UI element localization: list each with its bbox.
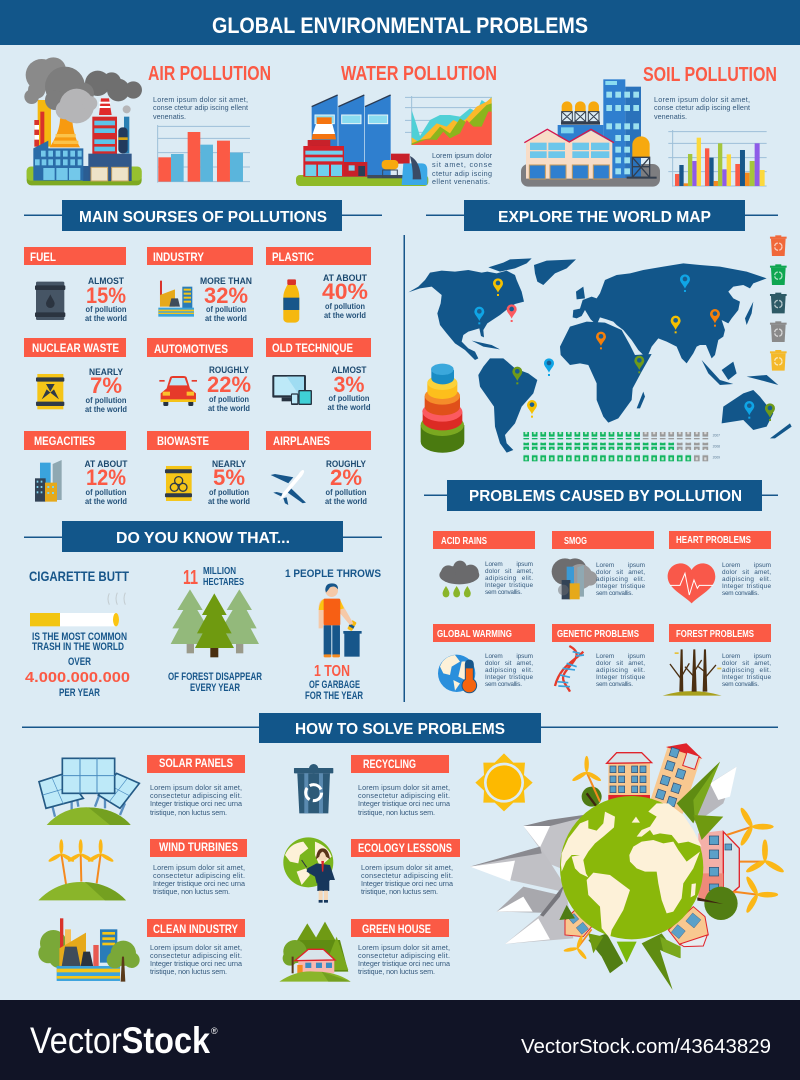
card: clean industry: CLEAN INDUSTRY bbox=[153, 922, 238, 936]
card: plastic: PLASTIC bbox=[272, 250, 314, 264]
card: megacities: 12% bbox=[86, 465, 126, 490]
card: heart problems: Integer tristique bbox=[722, 583, 771, 590]
card: recycling: consectetur adipiscing elit. bbox=[358, 791, 450, 800]
card: industry: 32% bbox=[204, 283, 248, 308]
card: solar panels: SOLAR PANELS bbox=[159, 756, 233, 770]
card: industry bbox=[147, 247, 253, 323]
fact: forest loss: HECTARES bbox=[203, 577, 244, 588]
icons: coloured recycling bins legend bbox=[770, 235, 787, 371]
fact: garbage per person: FOR THE YEAR bbox=[305, 690, 363, 702]
card: airplanes: of pollution bbox=[326, 487, 366, 497]
card: genetic problems: dolor sit amet, bbox=[596, 660, 645, 667]
card: genetic problems bbox=[552, 624, 654, 692]
card: automotives: AUTOMOTIVES bbox=[154, 342, 228, 356]
card: acid rains: ACID RAINS bbox=[441, 536, 487, 547]
card: wind turbines bbox=[38, 839, 247, 900]
card: smog: dolor sit amet, bbox=[596, 569, 645, 576]
card: clean industry: Integer tristique orci nec urna bbox=[150, 959, 242, 968]
illustration: sun and green planet bbox=[470, 738, 785, 990]
fact: cigarette butt: 4.000.000.000 bbox=[25, 669, 130, 686]
card: wind turbines: Lorem ipsum dolor sit amet, bbox=[153, 863, 245, 872]
icon: trees bbox=[171, 589, 259, 657]
text: water description: sit amet, conse bbox=[432, 160, 492, 169]
card: old technique: OLD TECHNIQUE bbox=[272, 341, 353, 355]
card: solar panels: Integer tristique orci nec urna bbox=[150, 799, 242, 808]
card: smog bbox=[552, 531, 654, 599]
card: acid rains bbox=[433, 531, 535, 597]
card: genetic problems: sem convallis. bbox=[596, 681, 633, 688]
card: global warming: GLOBAL WARMING bbox=[437, 629, 512, 640]
card: wind turbines: Integer tristique orci nec urna bbox=[153, 879, 245, 888]
card: plastic: 40% bbox=[322, 279, 368, 304]
card: global warming: Lorem ipsum bbox=[485, 653, 533, 660]
fact: cigarette butt bbox=[25, 568, 130, 699]
card: biowaste: at the world bbox=[208, 496, 250, 506]
icon: cigarette bbox=[30, 593, 125, 626]
fact: cigarette butt: TRASH IN THE WORLD bbox=[32, 641, 124, 653]
text: soil description: Lorem ipsum dolor sit amet, bbox=[654, 95, 750, 104]
trees on planet bbox=[559, 762, 738, 990]
card: smog: Integer tristique bbox=[596, 583, 645, 590]
card: megacities: of pollution bbox=[86, 487, 126, 497]
fact: garbage per person: 1 TON bbox=[314, 663, 350, 680]
card: green house: GREEN HOUSE bbox=[362, 922, 431, 936]
card: airplanes: 2% bbox=[330, 465, 362, 490]
map: continents bbox=[408, 258, 792, 453]
pictogram: recycling bin rows bbox=[523, 432, 720, 461]
mountains bbox=[470, 767, 737, 944]
title banner: GLOBAL ENVIRONMENTAL PROBLEMS bbox=[212, 13, 588, 38]
panel: problems grid bbox=[433, 531, 771, 696]
fact: forest loss: EVERY YEAR bbox=[190, 682, 240, 694]
text: soil description: conse ctetur adip iscing ellent bbox=[654, 103, 750, 112]
heading: main sources of pollutions bbox=[24, 200, 382, 231]
footer watermark bar: VectorStock bbox=[30, 1020, 210, 1061]
card: automotives: ROUGHLY bbox=[209, 365, 250, 376]
card: smog: sem convallis. bbox=[596, 590, 633, 597]
card: recycling: Lorem ipsum dolor sit amet, bbox=[358, 783, 450, 792]
heading: main sources of pollutions: MAIN SOURSES OF POLLUTIONS bbox=[79, 209, 327, 226]
footer watermark bar bbox=[0, 1000, 800, 1080]
heading: problems caused by pollution bbox=[424, 480, 778, 511]
card: solar panels: Lorem ipsum dolor sit amet, bbox=[150, 783, 242, 792]
card: green house: Lorem ipsum dolor sit amet, bbox=[358, 943, 450, 952]
card: acid rains: Integer tristique bbox=[485, 582, 533, 589]
heading: problems caused by pollution: PROBLEMS CAUSED BY POLLUTION bbox=[469, 488, 742, 505]
card: genetic problems: Lorem ipsum bbox=[596, 653, 645, 660]
fact: cigarette butt: PER YEAR bbox=[59, 687, 100, 699]
card: nuclear waste: of pollution bbox=[86, 395, 126, 405]
card: forest problems: adipiscing elit. bbox=[722, 667, 771, 674]
bar chart: soil bbox=[668, 130, 767, 187]
card: megacities: MEGACITIES bbox=[34, 434, 95, 448]
pictogram: recycling bin rows: 2009 bbox=[713, 456, 720, 460]
globe bbox=[560, 796, 703, 939]
fact: garbage per person bbox=[285, 568, 381, 702]
card: old technique: at the world bbox=[328, 402, 370, 412]
card: industry: of pollution bbox=[206, 304, 246, 314]
card: nuclear waste bbox=[24, 338, 127, 414]
card: forest problems bbox=[663, 624, 771, 696]
card: old technique: ALMOST bbox=[332, 365, 367, 376]
footer watermark bar: ® bbox=[211, 1026, 218, 1036]
card: nuclear waste: 7% bbox=[90, 373, 122, 398]
icon: air pollution factory bbox=[24, 57, 142, 185]
card: genetic problems: Integer tristique bbox=[596, 674, 645, 681]
heading: water pollution: WATER POLLUTION bbox=[341, 63, 497, 85]
card: solar panels: tristique, non luctus sem. bbox=[150, 808, 227, 817]
card: airplanes: AIRPLANES bbox=[273, 434, 330, 448]
icon: sun bbox=[475, 753, 533, 811]
card: acid rains: sem convallis. bbox=[485, 589, 522, 596]
card: fuel: of pollution bbox=[86, 304, 126, 314]
pictogram: recycling bin rows: 2008 bbox=[713, 444, 720, 448]
card: global warming: sem convallis. bbox=[485, 681, 522, 688]
card: megacities bbox=[24, 431, 128, 506]
card: acid rains: adipiscing elit. bbox=[485, 575, 533, 582]
heading: air pollution: AIR POLLUTION bbox=[148, 63, 271, 85]
card: clean industry: tristique, non luctus sem. bbox=[150, 967, 227, 976]
wind turbines on planet bbox=[562, 756, 785, 961]
card: fuel: ALMOST bbox=[88, 276, 124, 287]
text: water description: Lorem ipsum dolor bbox=[432, 151, 493, 160]
heading: do you know that: DO YOU KNOW THAT... bbox=[116, 530, 290, 547]
card: nuclear waste: NEARLY bbox=[89, 367, 124, 378]
card: forest problems: Lorem ipsum bbox=[722, 653, 771, 660]
card: biowaste: BIOWASTE bbox=[157, 434, 209, 448]
panel: main sources grid bbox=[24, 247, 371, 506]
card: clean industry bbox=[38, 918, 245, 982]
card: old technique bbox=[266, 338, 371, 412]
card: wind turbines: consectetur adipiscing elit. bbox=[153, 871, 245, 880]
card: global warming: adipiscing elit. bbox=[485, 667, 533, 674]
card: plastic: at the world bbox=[324, 310, 366, 320]
card: smog: SMOG bbox=[564, 536, 587, 547]
text: water description: ctetur adip iscing bbox=[432, 169, 492, 178]
fact: cigarette butt: CIGARETTE BUTT bbox=[29, 568, 129, 584]
card: old technique: 3% bbox=[334, 372, 364, 397]
card: fuel bbox=[24, 247, 127, 323]
card: nuclear waste: at the world bbox=[85, 404, 127, 414]
card: automotives: at the world bbox=[208, 403, 250, 413]
panel: air pollution bbox=[24, 57, 271, 185]
card: forest problems: Integer tristique bbox=[722, 674, 771, 681]
fact: forest loss bbox=[168, 566, 262, 694]
card: nuclear waste: NUCLEAR WASTE bbox=[32, 341, 119, 355]
text: soil description bbox=[654, 95, 750, 121]
card: smog: Lorem ipsum bbox=[596, 562, 645, 569]
panel: world map bbox=[408, 235, 792, 461]
card: recycling bbox=[294, 755, 450, 817]
card: airplanes bbox=[266, 431, 371, 506]
card: ecology lessons: ECOLOGY LESSONS bbox=[358, 841, 452, 855]
card: ecology lessons: Integer tristique orci nec urna bbox=[361, 879, 453, 888]
area chart: water bbox=[405, 96, 492, 145]
card: ecology lessons: Lorem ipsum dolor sit amet, bbox=[361, 863, 453, 872]
card: forest problems: sem convallis. bbox=[722, 681, 759, 688]
buildings on planet bbox=[565, 738, 739, 947]
card: airplanes: ROUGHLY bbox=[326, 459, 367, 470]
icon: soil pollution factory bbox=[521, 79, 660, 187]
card: ecology lessons: tristique, non luctus sem. bbox=[361, 887, 438, 896]
card: solar panels bbox=[39, 755, 245, 825]
card: clean industry: consectetur adipiscing elit. bbox=[150, 951, 242, 960]
panel: water pollution bbox=[296, 63, 497, 186]
heading: explore the world map: EXPLORE THE WORLD MAP bbox=[498, 209, 711, 226]
icon: person and bin bbox=[319, 583, 362, 657]
card: recycling: Integer tristique orci nec urna bbox=[358, 799, 450, 808]
card: biowaste: NEARLY bbox=[212, 459, 247, 470]
map pins bbox=[474, 274, 775, 421]
card: fuel: at the world bbox=[85, 313, 127, 323]
card: fuel: 15% bbox=[86, 283, 126, 308]
card: ecology lessons: consectetur adipiscing elit. bbox=[361, 871, 453, 880]
card: heart problems: dolor sit amet, bbox=[722, 569, 771, 576]
card: megacities: AT ABOUT bbox=[84, 459, 128, 470]
card: fuel: FUEL bbox=[30, 250, 56, 264]
card: automotives: 22% bbox=[207, 372, 251, 397]
card: airplanes: at the world bbox=[325, 496, 367, 506]
text: air description bbox=[153, 95, 248, 121]
card: recycling: tristique, non luctus sem. bbox=[358, 808, 435, 817]
title banner bbox=[0, 0, 800, 45]
panel: do you know facts bbox=[25, 566, 381, 702]
card: biowaste: 5% bbox=[213, 465, 245, 490]
card: green house: consectetur adipiscing elit. bbox=[358, 951, 450, 960]
fact: garbage per person: OF GARBAGE bbox=[309, 679, 360, 691]
text: water description bbox=[432, 151, 493, 186]
card: acid rains: dolor sit amet, bbox=[485, 568, 533, 575]
card: wind turbines: tristique, non luctus sem. bbox=[153, 887, 230, 896]
text: air description: conse ctetur adip iscing ellent bbox=[153, 103, 248, 112]
card: green house: tristique, non luctus sem. bbox=[358, 967, 435, 976]
card: megacities: at the world bbox=[85, 496, 127, 506]
card: recycling: RECYCLING bbox=[363, 757, 416, 771]
card: biowaste bbox=[147, 431, 250, 506]
card: forest problems: FOREST PROBLEMS bbox=[676, 629, 754, 640]
text: soil description: venenatis. bbox=[654, 112, 687, 121]
card: green house: Integer tristique orci nec urna bbox=[358, 959, 450, 968]
card: clean industry: Lorem ipsum dolor sit amet, bbox=[150, 943, 242, 952]
card: forest problems: dolor sit amet, bbox=[722, 660, 771, 667]
text: air description: Lorem ipsum dolor sit amet, bbox=[153, 95, 248, 104]
fact: cigarette butt: OVER bbox=[68, 656, 91, 668]
card: global warming: dolor sit amet, bbox=[485, 660, 533, 667]
card: plastic bbox=[266, 247, 371, 323]
card: automotives bbox=[147, 338, 253, 413]
card: ecology lessons bbox=[283, 837, 460, 903]
fact: forest loss: 11 bbox=[183, 567, 198, 589]
card: automotives: of pollution bbox=[209, 394, 249, 404]
card: wind turbines: WIND TURBINES bbox=[159, 840, 238, 854]
card: old technique: of pollution bbox=[328, 393, 370, 403]
card: smog: adipiscing elit. bbox=[596, 576, 645, 583]
card: plastic: AT ABOUT bbox=[323, 273, 367, 284]
card: heart problems: HEART PROBLEMS bbox=[676, 535, 751, 546]
fact: garbage per person: 1 PEOPLE THROWS bbox=[285, 568, 381, 580]
chart: stacked cylinder bbox=[421, 364, 464, 453]
card: industry: INDUSTRY bbox=[153, 250, 204, 264]
text: water description: ellent venenatis. bbox=[432, 177, 490, 186]
card: global warming: Integer tristique bbox=[485, 674, 533, 681]
card: acid rains: Lorem ipsum bbox=[485, 561, 533, 568]
heading: explore the world map bbox=[426, 200, 778, 231]
card: genetic problems: GENETIC PROBLEMS bbox=[557, 629, 639, 640]
card: solar panels: consectetur adipiscing elit. bbox=[150, 791, 242, 800]
pictogram: recycling bin rows: 2007 bbox=[713, 434, 720, 438]
card: global warming bbox=[433, 624, 535, 693]
icon: water pollution factory bbox=[296, 95, 428, 186]
panel: soil pollution bbox=[521, 64, 777, 187]
heading: how to solve problems: HOW TO SOLVE PROBLEMS bbox=[295, 721, 505, 738]
fact: forest loss: OF FOREST DISAPPEAR bbox=[168, 671, 262, 683]
card: industry: at the world bbox=[205, 313, 247, 323]
text: air description: venenatis. bbox=[153, 112, 186, 121]
fact: cigarette butt: IS THE MOST COMMON bbox=[32, 631, 127, 643]
card: biowaste: of pollution bbox=[209, 487, 249, 497]
fact: forest loss: MILLION bbox=[203, 566, 236, 577]
footer watermark bar: VectorStock.com/43643829 bbox=[521, 1036, 771, 1058]
bar chart: air bbox=[158, 125, 250, 183]
card: heart problems: adipiscing elit. bbox=[722, 576, 771, 583]
panel: solutions bbox=[38, 755, 460, 982]
card: green house bbox=[279, 919, 450, 982]
card: heart problems: sem convallis. bbox=[722, 590, 759, 597]
heading: do you know that bbox=[24, 521, 382, 552]
heading: how to solve problems bbox=[22, 713, 778, 743]
card: industry: MORE THAN bbox=[200, 276, 252, 287]
card: genetic problems: adipiscing elit. bbox=[596, 667, 645, 674]
card: plastic: of pollution bbox=[325, 301, 365, 311]
card: heart problems bbox=[668, 531, 771, 603]
card: heart problems: Lorem ipsum bbox=[722, 562, 771, 569]
